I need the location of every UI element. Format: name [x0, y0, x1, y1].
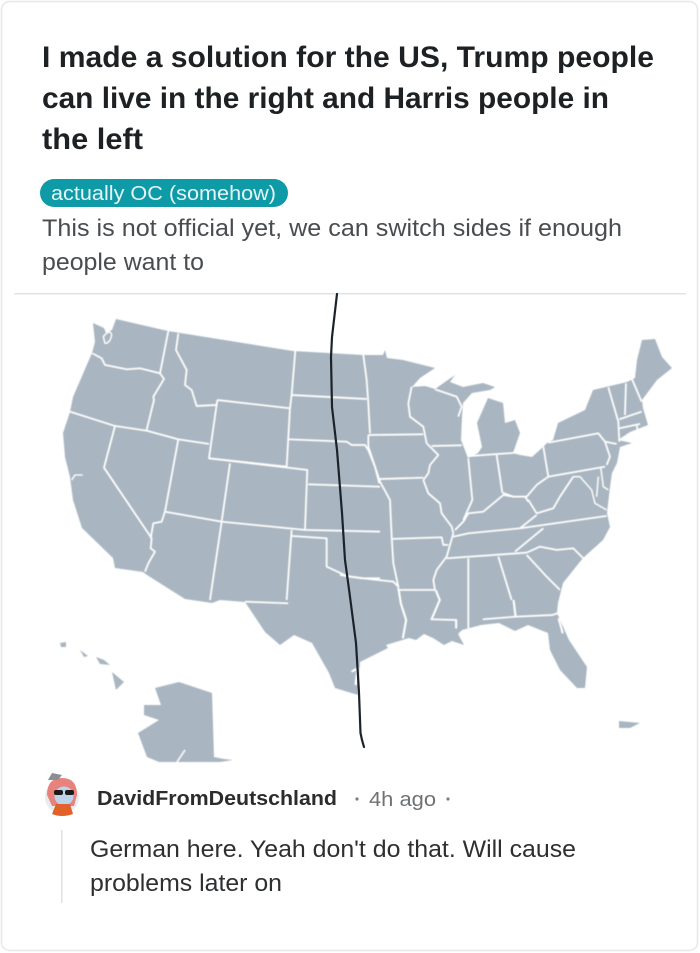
eastern state borders [340, 355, 642, 628]
title: I made a solution for the US, Trump people [42, 41, 654, 74]
comment username and time: DavidFromDeutschland [97, 788, 337, 810]
hand-drawn dividing line [331, 294, 364, 747]
southern state borders [245, 590, 563, 685]
map of the United States [60, 319, 672, 762]
western state borders [70, 331, 380, 600]
comment username and time: 4h ago [369, 789, 436, 811]
title [42, 41, 654, 156]
title: the left [42, 123, 143, 156]
title: can live in the right and Harris people in [42, 82, 609, 115]
Alaska [138, 682, 233, 762]
comment body: German here. Yeah don't do that. Will cause [90, 836, 576, 863]
subtitle text: This is not official yet, we can switch sides if enough [42, 215, 622, 242]
comment avatar [45, 773, 79, 816]
Puerto Rico [619, 721, 640, 728]
Hawaii [60, 642, 124, 690]
comment body: problems later on [90, 870, 282, 897]
comment body [90, 836, 576, 897]
comment username and time [97, 788, 450, 811]
subtitle text [42, 215, 622, 276]
contiguous states landmass [63, 319, 672, 695]
subtitle text: people want to [42, 249, 204, 276]
flair tag: actually OC (somehow) [40, 179, 288, 207]
flair tag: actually OC (somehow): actually OC (somehow) [51, 183, 276, 205]
